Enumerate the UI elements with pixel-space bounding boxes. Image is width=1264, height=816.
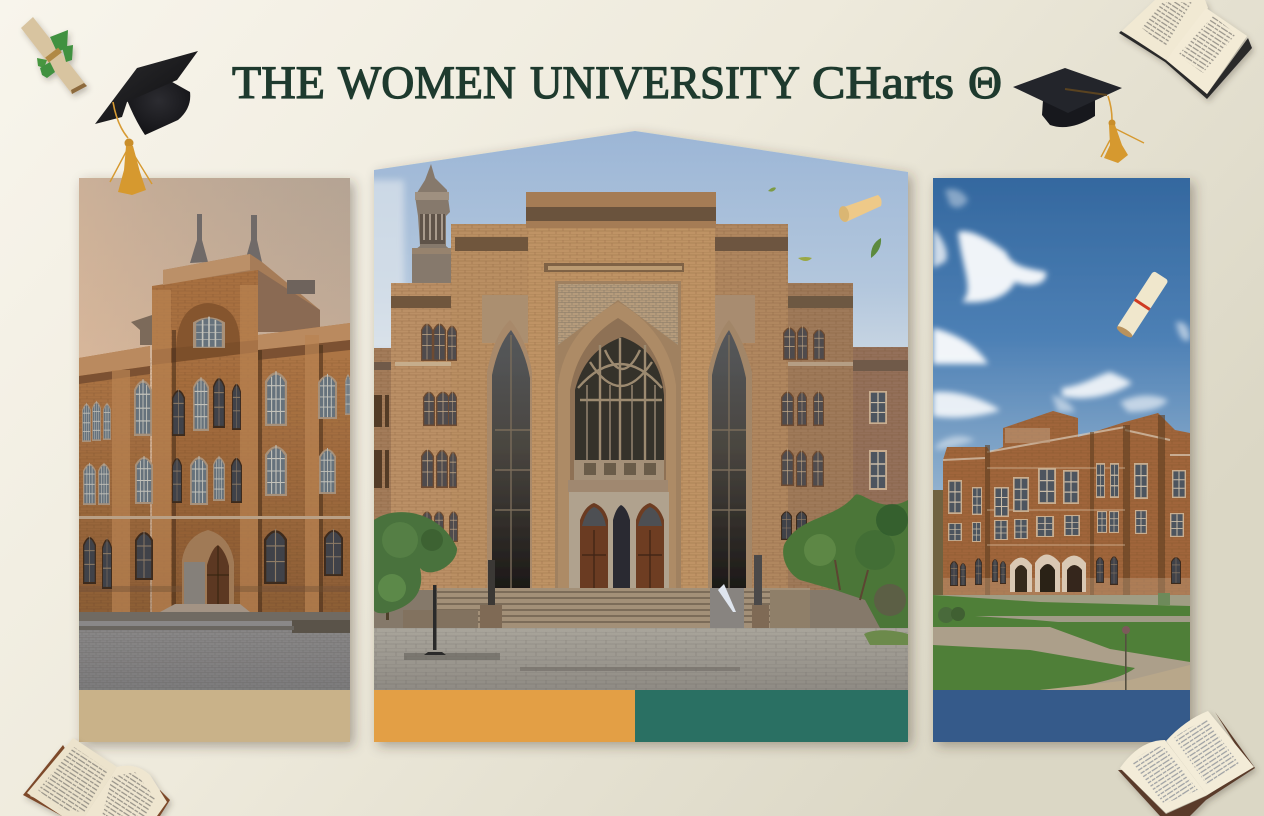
small windows (374, 323, 887, 542)
right building (933, 411, 1190, 596)
far wings (370, 347, 920, 524)
icon: open book bottom right (1118, 711, 1255, 816)
right building windows (948, 463, 1186, 586)
paper scroll (1115, 271, 1169, 339)
right trees (783, 494, 908, 645)
centre tower (412, 164, 453, 284)
right sky (933, 178, 1190, 498)
left plaza (79, 612, 350, 690)
icon: open book top right (1119, 0, 1252, 99)
lamp post (424, 585, 446, 655)
title: WOMEN (338, 57, 516, 109)
panel: left building (79, 178, 351, 742)
centre sky (370, 128, 920, 357)
icon: graduation cap right (1013, 68, 1144, 163)
teal band (635, 690, 908, 742)
outer wings (391, 283, 853, 590)
entrance steps (403, 555, 810, 630)
left tree (374, 512, 457, 620)
left colour band (79, 690, 350, 742)
clouds (933, 189, 1190, 450)
title: THE (232, 57, 325, 109)
central arch with rose window (558, 302, 676, 590)
blue band (933, 690, 1190, 742)
icon: diploma scroll with leaves (21, 17, 87, 94)
panel: centre building (364, 131, 908, 742)
left building entrance (182, 530, 234, 606)
title: CHarts (812, 57, 954, 109)
rolled paper (838, 195, 882, 223)
panel: right building (933, 178, 1190, 742)
title: Θ (968, 57, 1002, 109)
right building arched entrances (1010, 554, 1086, 592)
centre plaza (374, 628, 908, 690)
main doors (569, 492, 669, 589)
left building windows (82, 317, 351, 589)
ground base behind steps (374, 565, 908, 630)
side arched windows (487, 320, 752, 590)
right lawn and paths (933, 593, 1190, 690)
icon: open book bottom left (23, 738, 170, 816)
central tower block (526, 192, 716, 591)
orange band (374, 690, 635, 742)
title (232, 57, 1002, 109)
centre wings (451, 224, 788, 590)
floating leaves (768, 187, 881, 261)
left building facade (79, 214, 351, 612)
left sky (79, 178, 350, 690)
icon: graduation cap left (95, 51, 198, 195)
title: UNIVERSITY (530, 57, 800, 109)
